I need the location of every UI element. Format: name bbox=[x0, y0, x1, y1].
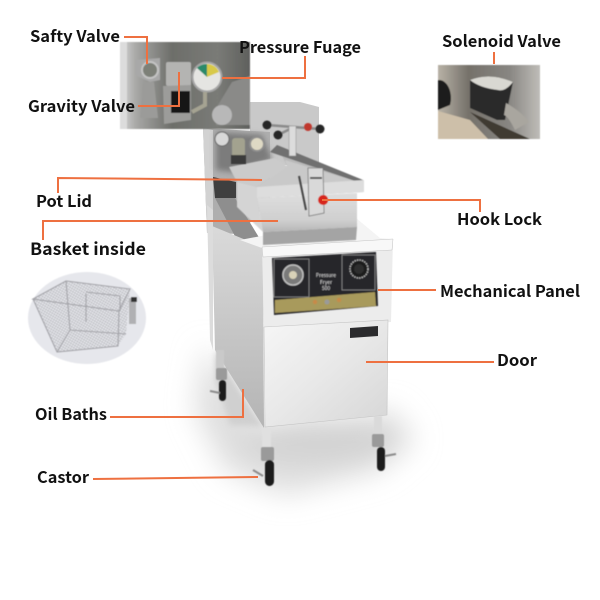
lid band bbox=[257, 180, 364, 198]
label: Mechanical Panel: Mechanical Panel bbox=[440, 278, 580, 302]
pressure gauge bbox=[192, 62, 222, 92]
backsplash bbox=[203, 128, 270, 234]
body side panel bbox=[212, 226, 264, 428]
timer dial bbox=[283, 265, 303, 285]
label: Castor: Castor bbox=[37, 464, 89, 488]
control panel: 500 bbox=[322, 285, 330, 292]
photo inset: frying basket bbox=[28, 272, 146, 364]
photo inset: solenoid valve bbox=[438, 65, 540, 139]
lid left top surface bbox=[229, 158, 287, 187]
counter top bbox=[240, 218, 393, 248]
label: Pot Lid: Pot Lid bbox=[36, 188, 92, 212]
handle with knobs bbox=[262, 120, 324, 156]
fryer machine bbox=[203, 102, 396, 486]
label: Door: Door bbox=[497, 347, 537, 371]
well slot bbox=[213, 177, 236, 198]
photo inset: valves bbox=[120, 42, 250, 129]
gravity valve bbox=[166, 62, 191, 86]
dark recess behind gauges bbox=[216, 132, 272, 172]
label: Hook Lock: Hook Lock bbox=[457, 206, 542, 230]
temperature dial bbox=[350, 260, 368, 278]
lid front face bbox=[257, 193, 357, 232]
gauges on back panel bbox=[215, 132, 264, 164]
label: Gravity Valve: Gravity Valve bbox=[28, 93, 135, 117]
safety valve bbox=[135, 58, 160, 82]
label: Solenoid Valve: Solenoid Valve bbox=[442, 28, 561, 52]
door bbox=[264, 320, 388, 427]
leader lines bbox=[43, 37, 494, 479]
label: Oil Baths: Oil Baths bbox=[35, 401, 107, 425]
control panel bbox=[272, 252, 378, 315]
control panel: Fryer bbox=[320, 279, 332, 286]
floor shadow bbox=[195, 345, 415, 495]
panel text: Pressure bbox=[316, 272, 336, 279]
back panel top bbox=[250, 102, 319, 165]
lid assembly bbox=[229, 145, 364, 245]
lid right top surface bbox=[257, 145, 364, 198]
label: Basket inside: Basket inside bbox=[30, 235, 146, 260]
hook lock latch bbox=[299, 168, 328, 216]
label: Pressure Fuage: Pressure Fuage bbox=[239, 34, 361, 58]
front body bbox=[262, 239, 393, 330]
label: Safty Valve: Safty Valve bbox=[30, 23, 120, 47]
lid left face bbox=[237, 182, 263, 232]
legs and castors bbox=[210, 350, 396, 486]
lid base bbox=[263, 227, 357, 245]
front lip bbox=[262, 239, 393, 257]
side shadow wedge bbox=[215, 350, 263, 427]
